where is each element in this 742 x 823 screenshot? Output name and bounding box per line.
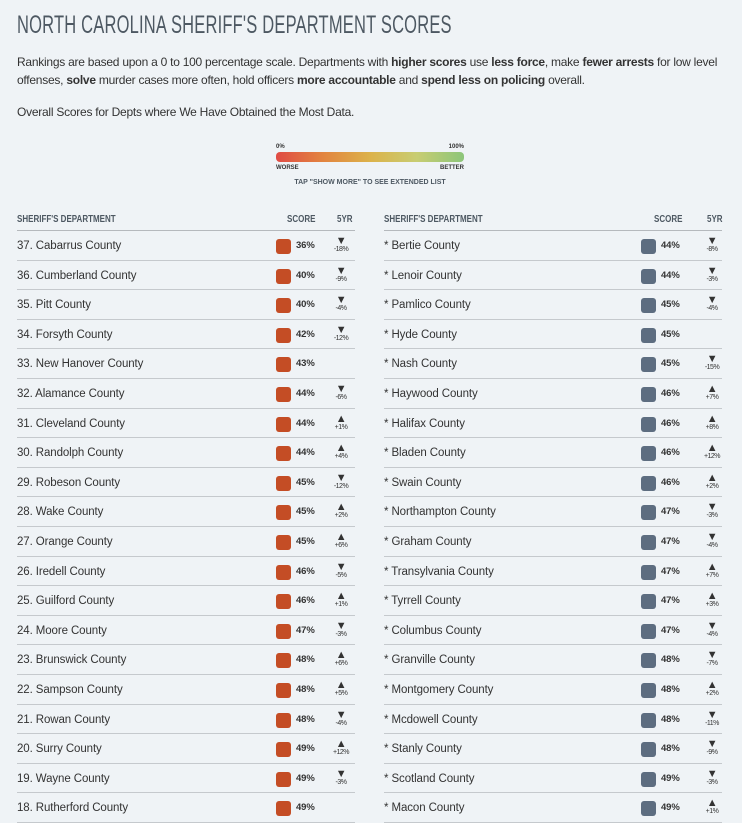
panel: left column ranked counties: ▼	[336, 383, 346, 395]
panel: right column counties: +2%	[706, 483, 718, 490]
panel: left column ranked counties: -4%	[336, 720, 346, 726]
panel: right column counties: 45%	[661, 329, 680, 340]
subtitle text: Overall Scores for Depts where We Have Obtained the Most Data.	[17, 105, 354, 119]
panel: right column counties: 46%	[661, 477, 680, 488]
panel: right column counties: 48%	[661, 654, 680, 665]
panel: left column ranked counties: -9%	[336, 276, 346, 283]
panel: left column ranked counties: 22. Sampson County	[17, 684, 123, 696]
panel: left column ranked counties: 43%	[296, 358, 315, 369]
panel: right column counties: 49%	[661, 773, 680, 784]
panel: right column counties: 46%	[661, 418, 680, 429]
panel: left column ranked counties: -3%	[336, 631, 346, 638]
panel: left column ranked counties: 34. Forsyth County	[17, 329, 112, 341]
panel: right column counties: * Nash County	[384, 358, 457, 370]
panel: right column counties: ▲	[707, 413, 717, 425]
panel: right column counties: +2%	[706, 690, 718, 697]
panel: left column ranked counties: 46%	[296, 595, 315, 606]
legend: color scale: BETTER	[440, 165, 464, 171]
panel: right column counties: +3%	[706, 601, 718, 608]
panel: left column ranked counties: 48%	[296, 714, 315, 724]
panel: right column counties: 48%	[661, 684, 680, 695]
panel: right column counties: * Montgomery County	[384, 684, 493, 696]
panel: left column ranked counties: -3%	[336, 779, 346, 786]
panel: left column ranked counties: 36%	[296, 240, 315, 251]
panel: left column ranked counties: 40%	[296, 270, 315, 281]
panel: right column counties: -9%	[707, 749, 717, 756]
panel: left column ranked counties: ▼	[336, 235, 346, 247]
panel: left column ranked counties: ▲	[336, 649, 346, 661]
panel: right column counties: -4%	[707, 631, 717, 638]
panel: left column ranked counties: ▼	[336, 324, 346, 336]
panel: left column ranked counties: 44%	[296, 447, 315, 458]
intro text: Rankings are based upon a 0 to 100 percentage scale. Departments with higher scores use less force, make fewer arrests for low level offenses, solve murder cases more often, hold officers more accountable and spend less on policing overall.	[17, 55, 717, 87]
panel: left column ranked counties: +5%	[335, 690, 347, 697]
panel: right column counties: ▼	[707, 531, 717, 543]
panel: left column ranked counties: ▲	[336, 590, 346, 602]
panel: left column ranked counties: -18%	[334, 246, 348, 253]
panel: left column ranked counties: 48%	[296, 684, 315, 695]
panel: left column ranked counties: -12%	[334, 483, 348, 490]
panel: right column counties: * Haywood County	[384, 388, 478, 400]
panel: right column counties: * Scotland County	[384, 773, 474, 785]
panel: left column ranked counties: ▼	[336, 265, 346, 277]
panel: left column ranked counties: 27. Orange County	[17, 536, 112, 548]
panel: right column counties: SHERIFF'S DEPARTMENT	[384, 214, 483, 225]
panel: right column counties: * Stanly County	[384, 743, 462, 755]
panel: right column counties: * Hyde County	[384, 329, 457, 341]
panel: right column counties: 47%	[661, 566, 680, 577]
panel: left column ranked counties: ▼	[336, 620, 346, 632]
panel: right column counties: 47%	[661, 506, 680, 517]
panel: left column ranked counties: 42%	[296, 329, 315, 340]
panel: left column ranked counties: ▼	[336, 561, 346, 573]
legend: color scale: WORSE	[276, 165, 299, 171]
panel: left column ranked counties: ▲	[336, 442, 346, 454]
panel: right column counties: * Pamlico County	[384, 299, 471, 311]
panel: left column ranked counties: SHERIFF'S DEPARTMENT	[17, 214, 116, 225]
panel: left column ranked counties: 23. Brunswick County	[17, 654, 126, 666]
panel: right column counties: ▼	[707, 768, 717, 780]
panel: right column counties: ▲	[707, 472, 717, 484]
panel: right column counties: 44%	[661, 240, 680, 251]
panel: right column counties: ▲	[707, 442, 717, 454]
panel: right column counties: * Mcdowell County	[384, 714, 478, 726]
panel: right column counties: 45%	[661, 299, 680, 310]
panel: right column counties: ▼	[707, 649, 717, 661]
panel: right column counties: -3%	[707, 276, 717, 283]
panel: left column ranked counties: 26. Iredell County	[17, 566, 105, 578]
panel: right column counties: +7%	[706, 572, 718, 579]
panel: left column ranked counties: 47%	[296, 625, 315, 636]
panel: left column ranked counties: 45%	[296, 536, 315, 547]
panel: right column counties: +12%	[704, 453, 720, 460]
panel: right column counties: ▼	[707, 620, 717, 632]
panel: left column ranked counties: 49%	[296, 743, 315, 754]
panel: left column ranked counties: 48%	[296, 654, 315, 665]
panel: right column counties: * Columbus County	[384, 625, 481, 637]
panel: right column counties: +1%	[706, 808, 718, 815]
panel: right column counties: ▲	[707, 561, 717, 573]
panel: right column counties: ▲	[707, 383, 717, 395]
panel: left column ranked counties: +12%	[333, 749, 349, 756]
panel: right column counties: ▲	[707, 797, 717, 809]
legend: color scale: TAP "SHOW MORE" TO SEE EXTENDED LIST	[294, 179, 446, 186]
panel: left column ranked counties: ▼	[336, 768, 346, 780]
panel: left column ranked counties: 29. Robeson County	[17, 477, 120, 489]
panel: right column counties: 45%	[661, 358, 680, 369]
panel: left column ranked counties: +1%	[335, 601, 347, 608]
panel: left column ranked counties: 33. New Hanover County	[17, 358, 143, 370]
panel: right column counties: * Bladen County	[384, 447, 466, 459]
legend: color scale	[276, 144, 464, 186]
panel: right column counties: SCORE	[654, 214, 682, 225]
panel: left column ranked counties: 24. Moore County	[17, 625, 107, 637]
panel: left column ranked counties: 35. Pitt County	[17, 299, 91, 311]
panel: right column counties: -4%	[707, 542, 717, 549]
panel: left column ranked counties: 36. Cumberland County	[17, 270, 136, 282]
panel: left column ranked counties: -6%	[336, 394, 346, 401]
panel: left column ranked counties: ▲	[336, 738, 346, 750]
panel: right column counties: -4%	[707, 305, 717, 312]
panel: right column counties: -3%	[707, 779, 717, 786]
panel: left column ranked counties: ▲	[336, 501, 346, 513]
panel: left column ranked counties: 40%	[296, 299, 315, 310]
panel: right column counties: -7%	[707, 660, 717, 667]
panel: left column ranked counties: 25. Guilford County	[17, 595, 114, 607]
panel: right column counties: 48%	[661, 743, 680, 754]
panel: right column counties: ▼	[707, 265, 717, 277]
panel: right column counties: 5YR	[707, 214, 723, 225]
panel: left column ranked counties: 49%	[296, 802, 315, 813]
panel: right column counties: ▼	[707, 235, 717, 247]
panel: left column ranked counties: ▼	[336, 294, 346, 306]
panel: right column counties: * Bertie County	[384, 240, 460, 252]
panel: left column ranked counties: ▼	[336, 472, 346, 484]
panel: right column counties: * Halifax County	[384, 418, 465, 430]
panel: left column ranked counties: 28. Wake County	[17, 506, 103, 518]
panel: left column ranked counties: +1%	[335, 424, 347, 431]
panel: right column counties: * Tyrrell County	[384, 595, 461, 607]
panel: left column ranked counties: ▲	[336, 413, 346, 425]
panel: left column ranked counties: 44%	[296, 418, 315, 429]
panel: right column counties: 46%	[661, 447, 680, 458]
panel: right column counties: -3%	[707, 512, 717, 519]
panel: left column ranked counties: SCORE	[287, 214, 315, 225]
panel: left column ranked counties: ▲	[336, 531, 346, 543]
panel: left column ranked counties: +6%	[335, 542, 347, 549]
title: NORTH CAROLINA SHERIFF'S DEPARTMENT SCORES	[17, 11, 452, 39]
panel: left column ranked counties: 20. Surry County	[17, 743, 102, 755]
panel: right column counties: 46%	[661, 388, 680, 399]
panel: left column ranked counties: ▼	[336, 708, 346, 720]
panel: right column counties: -8%	[707, 246, 717, 253]
legend: color scale: 100%	[449, 144, 464, 150]
panel: right column counties: * Swain County	[384, 477, 461, 489]
panel: right column counties: ▼	[707, 353, 717, 365]
panel: left column ranked counties: 49%	[296, 773, 315, 784]
panel: left column ranked counties: +4%	[335, 453, 347, 460]
panel: right column counties: 49%	[661, 802, 680, 813]
panel: right column counties: ▼	[707, 738, 717, 750]
panel: right column counties: * Lenoir County	[384, 270, 462, 282]
panel: right column counties: * Granville County	[384, 654, 475, 666]
panel: left column ranked counties: 46%	[296, 566, 315, 577]
panel: right column counties: -15%	[705, 364, 719, 371]
panel: left column ranked counties: 19. Wayne County	[17, 773, 110, 785]
panel: right column counties: ▼	[707, 708, 717, 720]
panel: right column counties: * Macon County	[384, 802, 464, 814]
panel: right column counties: 48%	[661, 714, 680, 724]
panel: right column counties: ▼	[707, 501, 717, 513]
panel: left column ranked counties: 45%	[296, 477, 315, 488]
panel: left column ranked counties: +6%	[335, 660, 347, 667]
panel: left column ranked counties: 37. Cabarrus County	[17, 240, 121, 252]
panel: right column counties: * Graham County	[384, 536, 471, 548]
panel: right column counties: -11%	[705, 720, 719, 726]
panel: right column counties: 47%	[661, 536, 680, 547]
panel: right column counties: * Transylvania County	[384, 566, 494, 578]
panel: left column ranked counties: ▲	[336, 679, 346, 691]
panel: left column ranked counties: -4%	[336, 305, 346, 312]
panel: right column counties: ▲	[707, 679, 717, 691]
panel: right column counties: 44%	[661, 270, 680, 281]
panel: right column counties: +7%	[706, 394, 718, 401]
panel: right column counties: +8%	[706, 424, 718, 431]
panel: left column ranked counties: +2%	[335, 512, 347, 519]
panel: right column counties: ▲	[707, 590, 717, 602]
panel: left column ranked counties: 18. Rutherford County	[17, 802, 128, 814]
panel: left column ranked counties: 45%	[296, 506, 315, 517]
panel: left column ranked counties: 30. Randolph County	[17, 447, 123, 459]
panel: right column counties: 47%	[661, 625, 680, 636]
panel: right column counties: * Northampton County	[384, 506, 496, 518]
panel: left column ranked counties: -12%	[334, 335, 348, 342]
panel: right column counties	[384, 214, 723, 823]
panel: left column ranked counties: 31. Cleveland County	[17, 418, 125, 430]
panel: left column ranked counties: 44%	[296, 388, 315, 399]
panel: left column ranked counties: 21. Rowan County	[17, 714, 110, 726]
panel: left column ranked counties: 32. Alamance County	[17, 388, 124, 400]
panel: left column ranked counties	[17, 214, 355, 823]
panel: right column counties: 47%	[661, 595, 680, 606]
panel: left column ranked counties: -5%	[336, 572, 346, 579]
panel: left column ranked counties: 5YR	[337, 214, 353, 225]
panel: right column counties: ▼	[707, 294, 717, 306]
legend: color scale: 0%	[276, 144, 285, 150]
